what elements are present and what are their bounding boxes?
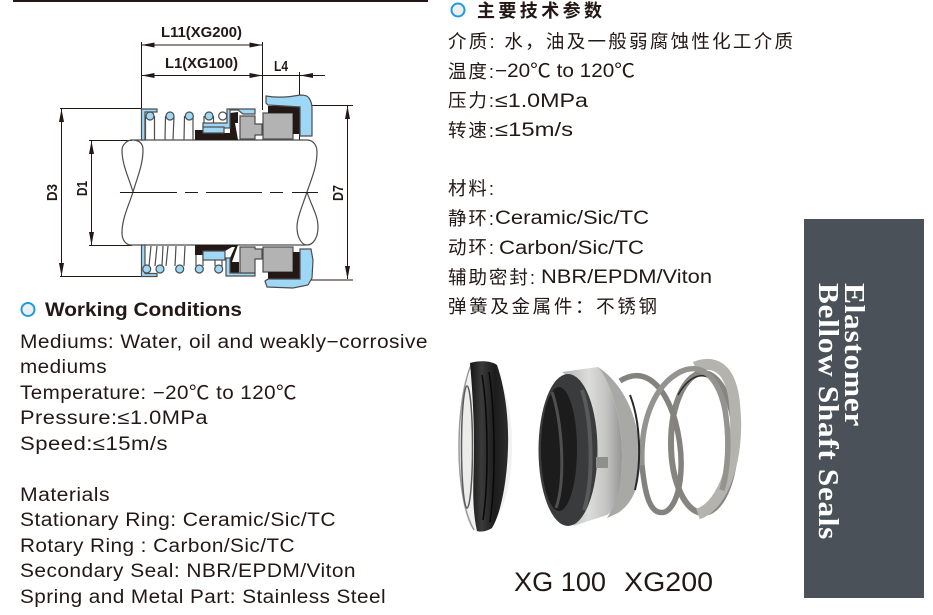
dimension D3: D3 [44,184,61,201]
caption: model names [514,567,713,597]
text block: working conditions in English: Pressure:≤1.0MPa [20,408,208,429]
stationary ring [459,361,512,532]
text block: materials in English [20,485,386,608]
side panel: product title [804,219,924,598]
text block: materials in English: Materials [20,485,110,506]
text block: working conditions in English: Mediums: Water, oil and weakly−corrosive [20,332,428,353]
text block: technical parameters in Chinese [448,31,793,141]
text block: materials in Chinese [448,178,712,317]
text block: materials in Chinese: 静环: [448,208,494,229]
extension lines [60,42,353,280]
text block: materials in Chinese: NBR/EPDM/Viton [541,267,712,288]
text block: materials in Chinese: 材料: [448,178,494,199]
text block: materials in Chinese: Ceramic/Sic/TC [495,208,649,229]
text block: materials in English: Secondary Seal: NBR/EPDM/Viton [20,561,356,582]
icon: blue circle bullet [452,4,464,16]
text block: working conditions in English: Speed:≤15m/s [20,434,168,455]
text block: technical parameters in Chinese: 转速: [448,120,494,141]
panel title: Bellow Shaft Seals [812,283,843,540]
upper seal assembly [142,95,312,140]
top rule [13,0,428,2]
caption: model names: XG200 [624,567,713,597]
text block: technical parameters in Chinese: 介质: 水，油及一般弱腐蚀性化工介质 [448,31,793,52]
technical drawing: seal cross-section [44,24,353,288]
bellows [195,112,238,140]
rotary seal body [538,367,640,526]
text block: materials in English: Stationary Ring: Ceramic/Sic/TC [20,510,336,531]
text block: materials in Chinese: 动环: [448,237,494,258]
dimension D1: D1 [74,181,91,196]
spring coils [146,116,214,140]
dimension L11 [142,24,262,45]
text block: materials in English: Spring and Metal Part: Stainless Steel [20,587,386,608]
dimension D1 [74,141,92,245]
dimension L4 [262,58,325,76]
panel title: Elastomer [838,283,869,427]
text block: technical parameters in Chinese: 压力: [448,90,494,111]
panel title [812,283,869,540]
O-ring [268,106,300,134]
text block: working conditions in English: mediums [20,357,107,378]
dimension L4: L4 [274,58,289,75]
heading: Working Conditions: Working Conditions [45,300,242,321]
spring [620,369,728,512]
spring retainer [671,364,736,514]
icon: blue circle bullet [22,303,34,316]
shaft [120,140,318,245]
gland cap [266,95,312,136]
spring retainer [142,109,157,140]
text block: technical parameters in Chinese: 温度: [448,61,494,82]
rotary ring [240,116,262,139]
caption: model names: XG 100 [514,567,606,597]
dimension L1 [142,55,262,76]
text block: working conditions in English [20,332,428,455]
text block: materials in Chinese: Carbon/Sic/TC [499,238,644,259]
text block: working conditions in English: Temperature: −20℃ to 120℃ [20,383,297,404]
dimension L11: L11(XG200) [161,24,242,41]
text block: technical parameters in Chinese: −20℃ to 120℃ [495,61,635,82]
text block: technical parameters in Chinese: ≤15m/s [495,120,573,141]
heading: technical parameters in Chinese: 主要技术参数 [477,0,602,21]
product photo: seal components [459,361,736,532]
text block: materials in Chinese: 辅助密封: [448,267,535,288]
text block: technical parameters in Chinese: ≤1.0MPa [495,91,589,112]
text block: materials in English: Rotary Ring : Carbon/Sic/TC [20,536,295,557]
lower seal assembly [142,245,313,288]
text block: materials in Chinese: 弹簧及金属件：不锈钢 [448,296,657,317]
dimension D7: D7 [330,185,347,201]
dimension L1: L1(XG100) [165,55,238,72]
stationary ring [263,113,293,139]
